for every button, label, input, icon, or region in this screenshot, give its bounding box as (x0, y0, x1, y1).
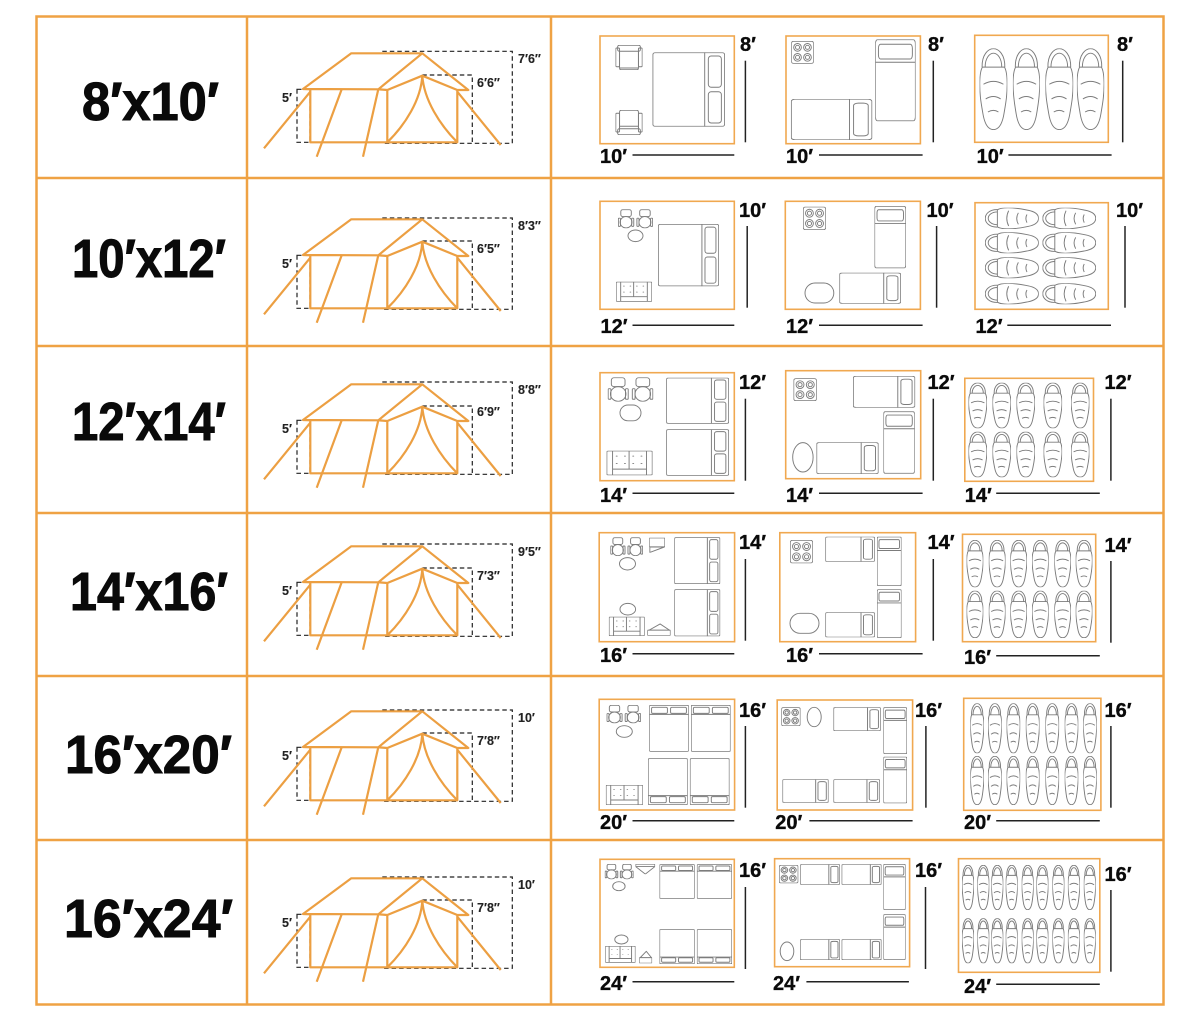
dimension: depth (1104, 700, 1132, 808)
dimension: width (786, 146, 923, 168)
dimension: width (600, 973, 734, 995)
icon: tv (636, 864, 655, 874)
size heading: 16′x24′ (64, 889, 233, 949)
floor plan: lounge with double bed (600, 200, 766, 338)
floor plan: two single beds (785, 200, 954, 338)
dimension: depth (915, 860, 942, 969)
tent diagram: 10′ (518, 711, 535, 725)
icon: double bed (648, 759, 688, 805)
icon: single bed (791, 99, 872, 140)
row: 14x16 tent (70, 532, 1132, 669)
floor plan: lounge with two double beds (600, 372, 766, 507)
tent diagram: 7′8″ (477, 901, 500, 915)
dimension: width (964, 647, 1100, 669)
dimension: depth: 16′ (1104, 700, 1132, 722)
dimension: depth: 16′ (915, 700, 942, 722)
tent diagram: 7′3″ (477, 569, 500, 583)
tent diagram: 5′ (282, 257, 292, 271)
icon: double bed (653, 52, 725, 127)
dimension: depth (740, 34, 756, 142)
tent diagram: 5′ (282, 916, 292, 930)
dimension: depth (739, 200, 766, 308)
dimension: depth (739, 700, 766, 808)
tent diagram: 5′ (282, 584, 292, 598)
dimension: width (773, 973, 909, 995)
dimension: width (786, 645, 923, 667)
tent diagram: 8′8″ (518, 383, 541, 397)
dimension: width (964, 812, 1100, 834)
dimension: width: 24′ (964, 976, 991, 998)
icon: dining chairs (605, 864, 633, 879)
dimension: width (786, 316, 923, 338)
icon: table (793, 443, 813, 472)
dimension: depth (1116, 200, 1143, 308)
icon: table (805, 283, 834, 303)
dimension: depth: 10′ (1116, 200, 1143, 222)
icon: table (628, 230, 643, 242)
floor plan: lounge with four double beds (599, 699, 766, 834)
icon: single bed (834, 707, 881, 731)
dimension: depth (1104, 372, 1132, 481)
dimension: width: 16′ (786, 645, 813, 667)
icon: table (790, 613, 819, 633)
icon: sleeping bags (962, 865, 1096, 963)
icon: stove (781, 707, 800, 726)
floor plan: lounge with two double beds (599, 532, 766, 667)
tent diagram (264, 218, 541, 323)
icon: sleeping bags (970, 704, 1097, 805)
dimension: width: 14′ (600, 485, 627, 507)
icon: single bed (800, 939, 840, 960)
dimension: depth (1104, 864, 1132, 972)
icon: sofa (616, 282, 652, 302)
row: 10x12 tent (72, 200, 1143, 338)
dimension: width: 16′ (600, 645, 627, 667)
dimension: depth (926, 200, 954, 308)
tent diagram (264, 544, 541, 650)
floor plan: sleeping bags (958, 859, 1132, 998)
dimension: width: 14′ (965, 485, 992, 507)
dimension: depth: 12′ (739, 372, 766, 394)
icon: single bed (883, 757, 907, 803)
row: 16x24 tent (64, 859, 1132, 998)
icon: single bed (826, 612, 875, 637)
icon: table (615, 935, 628, 944)
icon: tv (649, 538, 665, 552)
dimension: width (977, 146, 1112, 168)
row: 8x10 tent (82, 34, 1133, 168)
dimension: width (600, 316, 734, 338)
floor plan: four single beds (780, 532, 955, 667)
icon: single bed (834, 779, 880, 803)
floor plan: four single beds (775, 700, 942, 834)
dimension: depth: 14′ (928, 532, 955, 554)
dimension: width: 16′ (964, 647, 991, 669)
dimension: depth (1104, 535, 1132, 643)
icon: sofa (607, 451, 652, 475)
floor plan: two single beds (786, 34, 944, 168)
dimension: depth (739, 860, 766, 969)
icon: table (620, 405, 641, 421)
icon: double bed (660, 864, 695, 899)
icon: table (613, 882, 625, 891)
dimension: width (600, 812, 734, 834)
icon: stove (803, 207, 826, 230)
dimension: depth: 16′ (1104, 864, 1132, 886)
icon: table (807, 707, 821, 727)
icon: single bed (883, 708, 907, 754)
icon: single bed (842, 864, 881, 885)
dimension: width: 12′ (600, 316, 628, 338)
dimension: width: 24′ (600, 973, 627, 995)
icon: stove (791, 41, 814, 63)
icon: dining chairs (618, 210, 653, 228)
dimension: width: 20′ (964, 812, 991, 834)
icon: single bed (875, 40, 916, 121)
icon: table (620, 558, 636, 570)
icon: double bed (690, 759, 730, 805)
tent diagram: 9′5″ (518, 545, 541, 559)
icon: single bed (874, 206, 906, 268)
dimension: width (964, 976, 1100, 998)
dimension: depth: 16′ (915, 860, 942, 882)
dimension: width: 24′ (773, 973, 800, 995)
floor plan: lounge with double bed (600, 34, 756, 168)
icon: sofa (605, 946, 635, 963)
icon: double bed (691, 705, 731, 751)
dimension: depth (739, 532, 766, 641)
tent diagram (264, 710, 535, 815)
icon: double bed (697, 929, 732, 964)
icon: single bed (877, 537, 902, 586)
dimension: depth: 12′ (1104, 372, 1132, 394)
icon: single bed (800, 864, 840, 885)
dimension: width: 10′ (977, 146, 1004, 168)
tent diagram: 6′9″ (477, 405, 500, 419)
tent diagram: 5′ (282, 422, 292, 436)
icon: sleeping bags (969, 383, 1089, 477)
icon: single bed (853, 376, 915, 408)
icon: double bed (649, 705, 689, 751)
floor plan: lounge with four double beds (600, 859, 766, 995)
dimension: width (976, 316, 1111, 338)
icon: sofa (606, 785, 643, 805)
dimension: depth (915, 700, 942, 808)
icon: double bed (667, 378, 729, 424)
dimension: depth: 10′ (926, 200, 954, 222)
tent diagram: 6′5″ (477, 242, 500, 256)
dimension: width: 12′ (976, 316, 1003, 338)
dimension: width (600, 645, 734, 667)
icon: single bed (877, 590, 902, 638)
dimension: width (775, 812, 913, 834)
icon: stove (794, 379, 817, 401)
tent diagram (264, 382, 541, 488)
dimension: depth: 8′ (928, 34, 944, 56)
tent diagram: 5′ (282, 91, 292, 105)
dimension: width (600, 146, 734, 168)
icon: table (620, 603, 636, 615)
icon: double bed (667, 429, 729, 476)
icon: single bed (842, 939, 881, 960)
row: 16x20 tent (65, 698, 1132, 834)
size heading: 10′x12′ (72, 229, 226, 289)
dimension: depth: 8′ (1117, 34, 1133, 56)
row: 12x14 tent (72, 371, 1132, 507)
icon: sleeping bags (967, 540, 1092, 638)
tent diagram: 7′8″ (477, 734, 500, 748)
tent diagram: 5′ (282, 749, 292, 763)
icon: double bed (660, 929, 695, 964)
icon: single bed (817, 442, 878, 474)
icon: dining chairs (611, 538, 643, 556)
dimension: width (786, 485, 923, 507)
icon: dining chairs (608, 378, 653, 401)
dimension: depth (928, 34, 944, 142)
dimension: depth (1117, 34, 1133, 142)
dimension: depth: 16′ (739, 700, 766, 722)
icon: double bed (697, 864, 732, 899)
icon: single bed (883, 915, 906, 960)
dimension: width: 12′ (786, 316, 813, 338)
dimension: depth: 14′ (739, 532, 766, 554)
icon: single bed (840, 273, 901, 304)
icon: low table (639, 951, 652, 963)
dimension: width: 10′ (786, 146, 813, 168)
dimension: width: 14′ (786, 485, 813, 507)
size heading: 8′x10′ (82, 72, 219, 132)
size heading: 16′x20′ (65, 725, 232, 785)
dimension: depth: 14′ (1104, 535, 1132, 557)
icon: double bed (658, 224, 719, 286)
floor plan: sleeping bags (964, 698, 1132, 834)
floor plan: sleeping bags (965, 372, 1132, 507)
dimension: width (965, 485, 1100, 507)
icon: double bed (675, 537, 720, 584)
tent diagram: 6′6″ (477, 76, 500, 90)
dimension: depth: 16′ (739, 860, 766, 882)
dimension: depth: 12′ (928, 372, 955, 394)
icon: single bed (883, 864, 906, 910)
dimension: width: 20′ (775, 812, 803, 834)
tent diagram: 7′6″ (518, 52, 541, 66)
dimension: width: 20′ (600, 812, 627, 834)
size heading: 14′x16′ (70, 562, 228, 622)
tent diagram (264, 877, 535, 982)
dimension: depth: 8′ (740, 34, 756, 56)
floor plan: sleeping bags (962, 534, 1132, 669)
dimension: depth: 10′ (739, 200, 766, 222)
size heading: 12′x14′ (72, 392, 226, 452)
icon: single bed (826, 537, 875, 562)
tent diagram: 10′ (518, 878, 535, 892)
icon: double bed (675, 589, 720, 636)
icon: low table (648, 624, 670, 636)
floor plan: sleeping bags (975, 34, 1133, 168)
dimension: depth (928, 532, 955, 641)
icon: sleeping bags (980, 49, 1104, 130)
icon: single bed (883, 412, 915, 473)
icon: armchair (616, 110, 642, 135)
dimension: width (600, 485, 734, 507)
tent diagram (264, 51, 541, 157)
icon: table (616, 726, 632, 737)
dimension: depth (928, 372, 955, 481)
dimension: width: 10′ (600, 146, 627, 168)
icon: stove (790, 540, 813, 563)
floor plan: sleeping bags (975, 200, 1143, 338)
icon: stove (779, 865, 798, 883)
icon: armchair (616, 45, 642, 70)
icon: sofa (609, 617, 645, 636)
floor plan: six single beds (773, 859, 942, 995)
tent diagram: 8′3″ (518, 219, 541, 233)
floor plan: three single beds (786, 371, 955, 507)
icon: table (780, 942, 794, 961)
icon: sleeping bags (985, 208, 1096, 304)
icon: dining chairs (607, 705, 641, 723)
dimension: depth (739, 372, 766, 481)
icon: single bed (783, 779, 828, 803)
